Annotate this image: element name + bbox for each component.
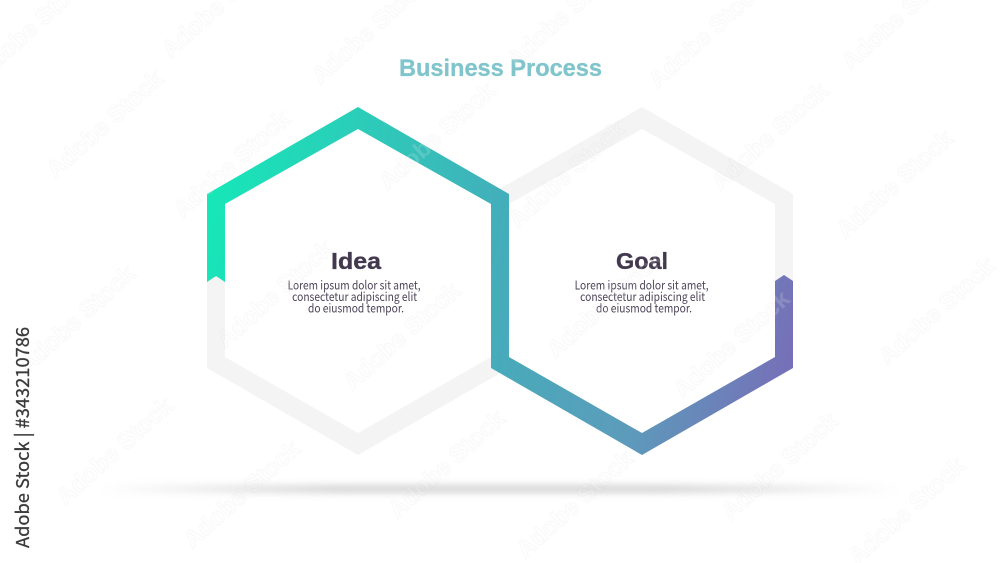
description: Idea: Lorem ipsum dolor sit amet, [288, 276, 421, 294]
watermark pattern: Adobe Stock [541, 245, 669, 364]
gradient progress band [207, 107, 793, 455]
watermark pattern: Adobe Stock [178, 435, 306, 554]
watermark pattern: Adobe Stock [668, 285, 796, 404]
watermark pattern: Adobe Stock [211, 235, 339, 354]
description: Goal: do eiusmod tempor. [596, 300, 692, 316]
hexagon track: right [491, 107, 793, 455]
description: Goal: consectetur adipiscing elit [580, 288, 706, 305]
heading: Goal: Goal [616, 248, 668, 274]
watermark pattern: Adobe Stock [873, 252, 1000, 371]
watermark pattern: Adobe Stock [503, 115, 631, 234]
watermark pattern: Adobe Stock [13, 260, 141, 379]
hexagon track: left [207, 107, 509, 455]
watermark pattern: Adobe Stock [831, 125, 959, 244]
description: Idea: do eiusmod tempor. [308, 300, 404, 316]
watermark pattern: Adobe Stock [51, 392, 179, 511]
watermark pattern: Adobe Stock [383, 405, 511, 524]
description: Idea: consectetur adipiscing elit [292, 288, 418, 305]
watermark pattern: Adobe Stock [373, 77, 501, 196]
watermark pattern: Adobe Stock [716, 407, 844, 526]
description: Goal: Lorem ipsum dolor sit amet, [575, 276, 709, 294]
text block: Goal [575, 248, 711, 316]
ground shadow [100, 486, 900, 492]
title: Business Process [399, 55, 602, 82]
watermark pattern: Adobe Stock [41, 65, 169, 184]
watermark pattern: Adobe Stock [338, 277, 466, 396]
watermark pattern: Adobe Stock [511, 445, 639, 563]
stock id label: Adobe Stock | #343210786 [9, 327, 35, 548]
watermark pattern: Adobe Stock [706, 77, 834, 196]
heading: Idea: Idea [331, 248, 382, 274]
watermark pattern: Adobe Stock [168, 105, 296, 224]
text block: Idea [288, 248, 423, 316]
